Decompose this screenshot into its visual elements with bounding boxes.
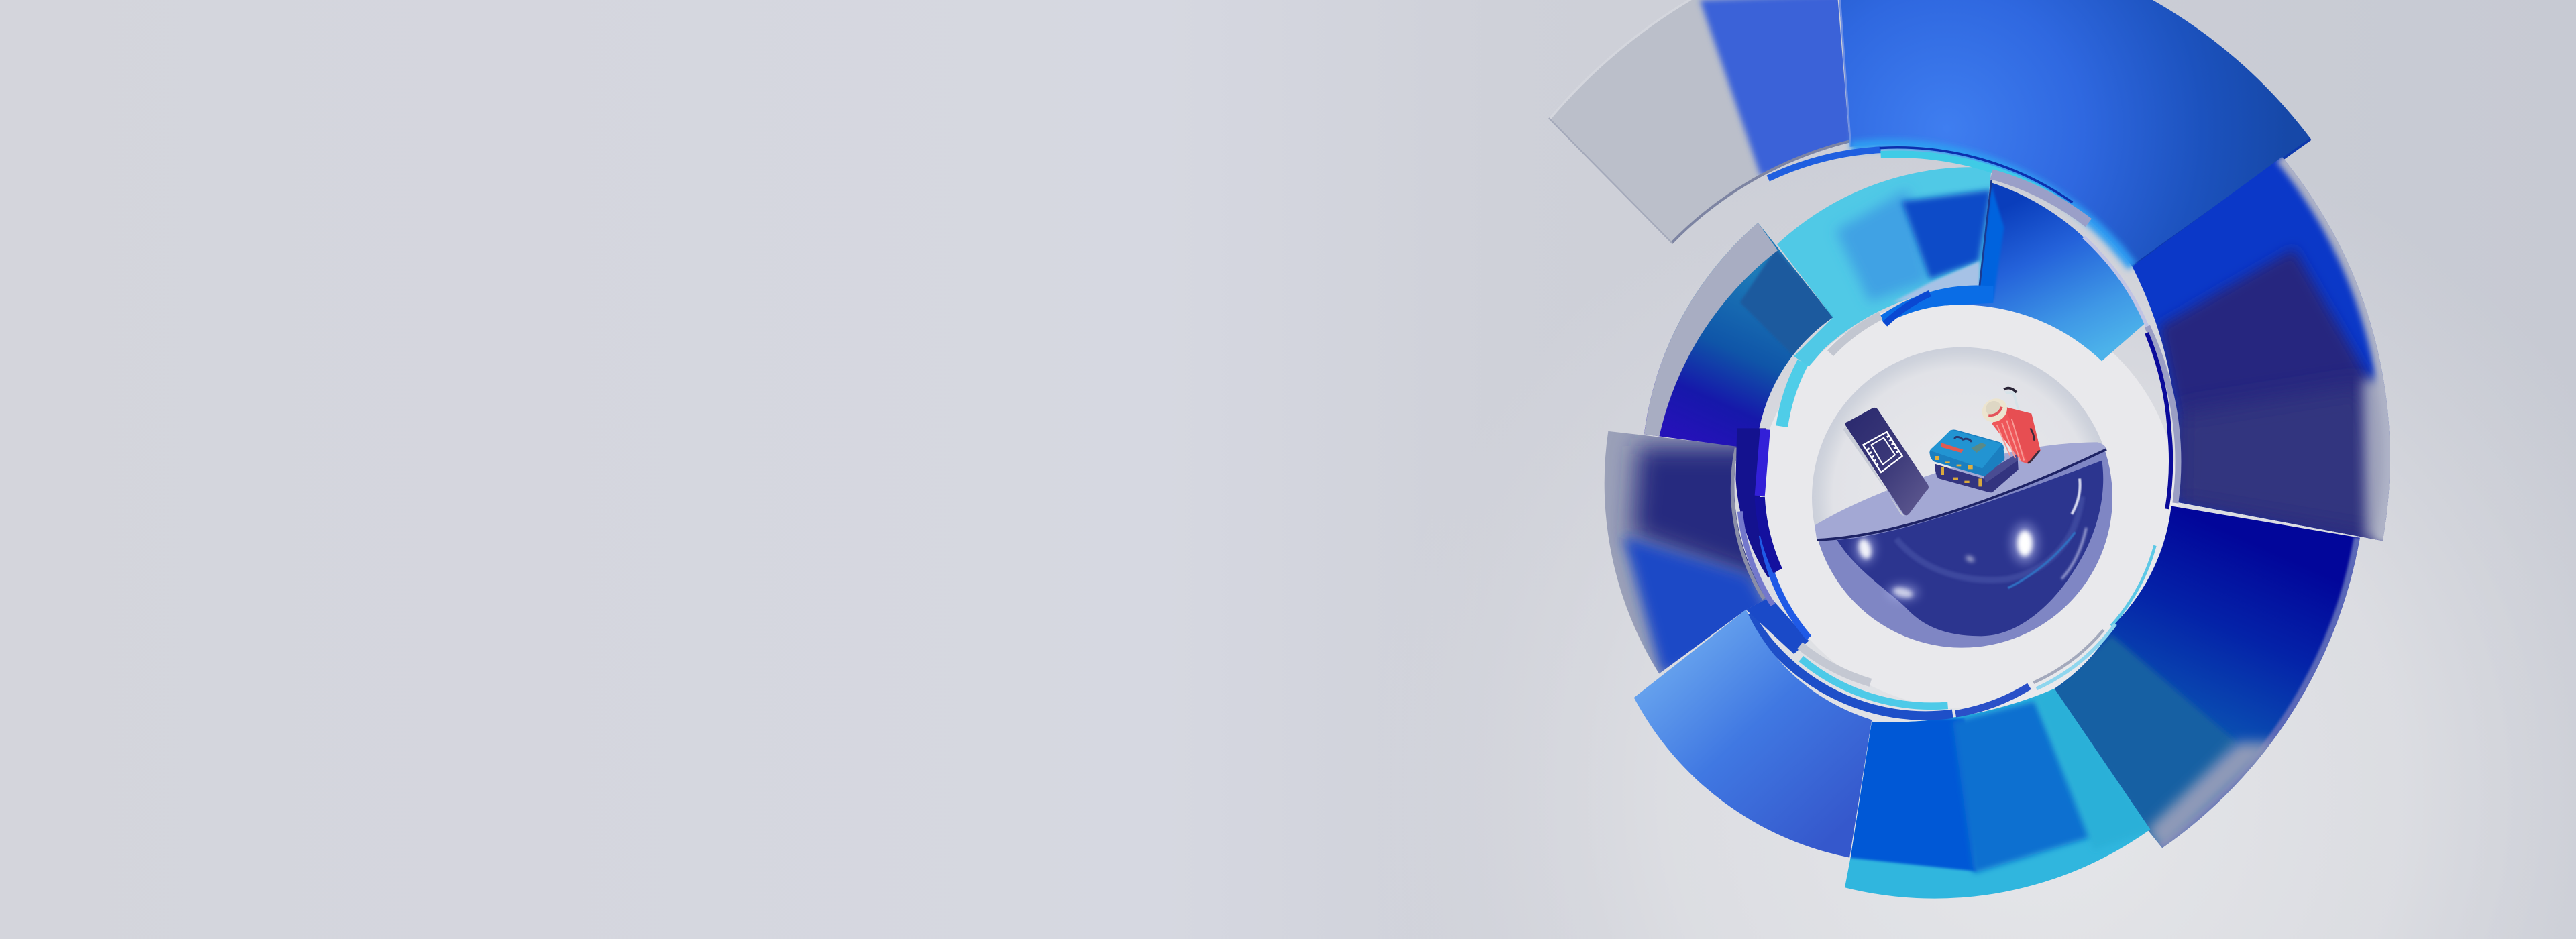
inner blue wash behind bottom strips (1746, 590, 1953, 716)
ring segment: top main blue (1839, 0, 2311, 266)
ring segment: right navy (2127, 150, 2396, 551)
ring segment: upper inner cyan and blue (1777, 167, 1991, 366)
red trolley case (1992, 388, 2041, 464)
bowl highlights (1855, 523, 2038, 600)
sphere with travel items (1807, 347, 2120, 653)
film frame icon (1863, 432, 1902, 472)
glass sphere (1812, 347, 2112, 648)
ring segment: bottom left light blue (1634, 610, 1872, 858)
tilted platform (1815, 442, 2106, 540)
ring segment: upper inner right blue (1880, 180, 2144, 361)
ring segment: bottom blue and cyan (1839, 683, 2156, 904)
ring segment: left navy (1605, 431, 1766, 673)
ring segment: top left glass and blue (1548, 0, 1849, 244)
inner thin arc strips (1740, 148, 2178, 714)
blue suitcase (1929, 429, 2004, 476)
central light disc (1756, 295, 2178, 708)
navy suitcase (1935, 454, 2019, 492)
glass ring graphic (1534, 0, 2396, 904)
phone icon (1843, 408, 1929, 516)
hat (1978, 394, 2012, 427)
ring segment: upper left teal and indigo (1644, 223, 1833, 447)
left dark indigo block (1736, 428, 1778, 578)
lower bowl (1818, 451, 2112, 648)
ring segment: lower right blue (2049, 503, 2372, 857)
